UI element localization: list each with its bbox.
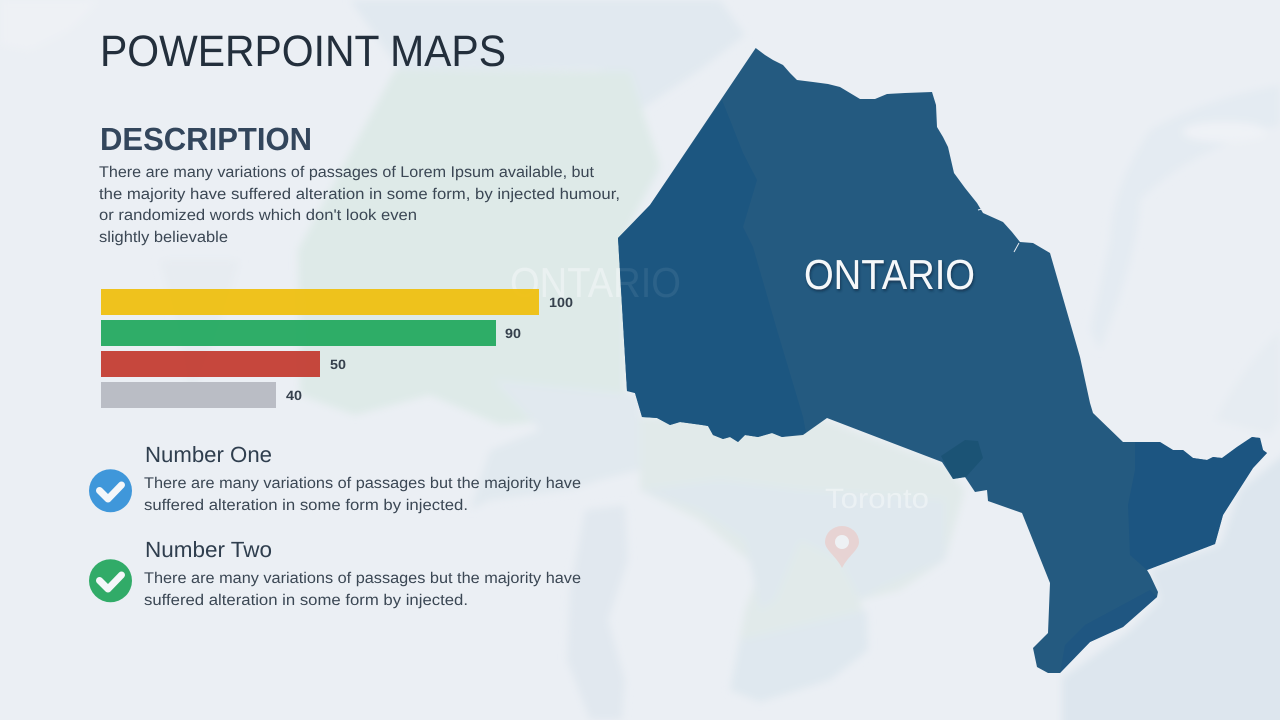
item: number one: suffered alteration in some form by injected.: [144, 497, 468, 514]
heading: description: DESCRIPTION: [100, 121, 312, 157]
icon: green check badge: [89, 559, 132, 602]
icon: blue check badge: [89, 469, 132, 512]
region: southern shore: [1060, 590, 1157, 673]
title: POWERPOINT MAPS: [100, 27, 506, 76]
bar: 40: 40: [286, 388, 302, 403]
item: number one: [144, 442, 581, 514]
text block: description: [99, 164, 620, 246]
bar chart: [101, 289, 573, 408]
item: number two: suffered alteration in some form by injected.: [144, 592, 468, 609]
bar: 50: 50: [330, 357, 346, 372]
text block: description: There are many variations of passages of Lorem Ipsum available, but: [99, 164, 595, 181]
ghost label: Toronto: Toronto: [825, 483, 929, 514]
item: number one: There are many variations of passages but the majority have: [144, 475, 581, 492]
text block: description: slightly believable: [99, 229, 228, 246]
item: number two: Number Two: [145, 537, 272, 562]
map label: ONTARIO: ONTARIO: [804, 251, 975, 298]
bar: 90: [101, 320, 521, 346]
bar: 90: 90: [505, 326, 521, 341]
bar: 40: [101, 382, 302, 408]
item: number one: Number One: [145, 442, 272, 467]
item: number two: There are many variations of passages but the majority have: [144, 570, 581, 587]
ghost label: ONTARIO: ONTARIO: [510, 259, 681, 306]
icon: faded map pin: [825, 526, 859, 568]
bar: 100: 100: [549, 295, 573, 310]
item: number two: [144, 537, 581, 609]
detail: coastline notches: [978, 209, 1019, 252]
region: lake district: [941, 440, 983, 479]
bar: 50: [101, 351, 346, 377]
map: Ontario province: [618, 48, 1267, 673]
region: western district: [618, 100, 806, 442]
region: main body: [618, 48, 1267, 673]
text block: description: the majority have suffered alteration in some form, by injected humour,: [99, 186, 620, 203]
bar: 100: [101, 289, 573, 315]
text block: description: or randomized words which don't look even: [99, 207, 417, 224]
region: eastern district: [1128, 437, 1267, 570]
